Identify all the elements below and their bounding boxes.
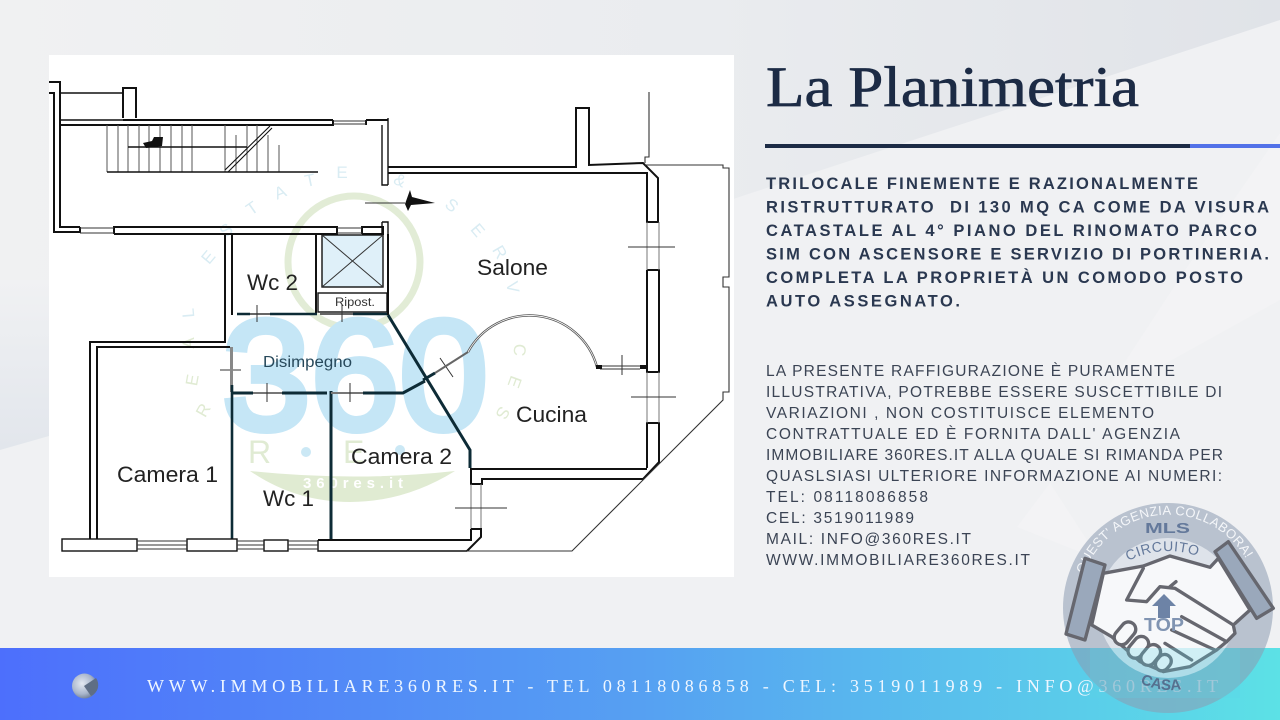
room labels: Disimpegno (263, 354, 352, 371)
watermark: 360 real estate services logo: R (248, 434, 271, 470)
watermark: 360 real estate services logo: E (336, 163, 348, 182)
panel: floor plan (49, 55, 734, 577)
badge label casa: CASA (1142, 675, 1181, 690)
text block: disclaimer and contacts: CONTRATTUALE ED È FORNITA DALL' AGENZIA (766, 426, 1181, 443)
watermark: 360 real estate services logo: 360res.it (303, 475, 403, 492)
badge label top: TOP (1144, 615, 1184, 635)
room labels: Camera 1 (117, 462, 218, 487)
staircase and landing walls (49, 82, 388, 234)
watermark: 360 real estate services logo: V (502, 280, 523, 295)
room labels: Camera 2 (351, 444, 452, 469)
footer bar (0, 648, 1280, 720)
text block: disclaimer and contacts: WWW.IMMOBILIARE360RES.IT (766, 552, 1031, 569)
handshake (1066, 542, 1273, 674)
room labels: Wc 2 (247, 270, 298, 295)
icon: footer logo (72, 674, 98, 698)
watermark: 360 real estate services logo: 360 (222, 289, 488, 463)
badge label MLS: MLS (1145, 520, 1190, 537)
text block: disclaimer and contacts: LA PRESENTE RAFFIGURAZIONE È PURAMENTE (766, 363, 1175, 380)
text block: property description: RISTRUTTURATO DI 130 MQ CA COME DA VISURA (766, 198, 1269, 216)
text block: disclaimer and contacts: IMMOBILIARE 360RES.IT ALLA QUALE SI RIMANDA PER (766, 447, 1223, 464)
watermark: 360 real estate services logo (179, 163, 530, 502)
text block: property description: TRILOCALE FINEMENTE E RAZIONALMENTE (766, 175, 1198, 193)
text block: property description: SIM CON ASCENSORE E SERVIZIO DI PORTINERIA. (766, 246, 1269, 264)
watermark: 360 real estate services logo: L (179, 307, 198, 319)
badge: MLS circuito casa top handshake (1063, 503, 1276, 713)
watermark: 360 real estate services logo: E (182, 373, 203, 387)
watermark: 360 real estate services logo: S (216, 219, 237, 241)
title rule (765, 144, 1280, 148)
room labels (117, 255, 588, 511)
watermark: 360 real estate services logo: E (197, 247, 219, 268)
room labels: Salone (477, 255, 548, 280)
room labels: Cucina (516, 402, 588, 427)
footer contacts: WWW.IMMOBILIARE360RES.IT - TEL 08118086858 - CEL: 3519011989 - INFO@360RES.IT (147, 676, 1218, 696)
band tint over lower hand (1090, 648, 1240, 698)
text block: disclaimer and contacts: CEL: 3519011989 (766, 510, 914, 527)
text block: disclaimer and contacts: QUASLSIASI ULTERIORE INFORMAZIONE AI NUMERI: (766, 468, 1222, 485)
watermark: 360 real estate services logo: C (510, 343, 530, 357)
walls: bottom facade with windows (62, 539, 467, 551)
watermark: 360 real estate services logo: R (192, 400, 215, 420)
watermark: 360 real estate services logo: E (467, 220, 489, 241)
text block: property description: COMPLETA LA PROPRIETÀ UN COMODO POSTO (766, 268, 1243, 287)
watermark: 360 real estate services logo: S (492, 403, 514, 422)
text block: disclaimer and contacts (766, 363, 1223, 569)
text block: property description: CATASTALE AL 4° PIANO DEL RINOMATO PARCO (766, 222, 1257, 240)
walls: salone and cucina (318, 92, 729, 551)
watermark: 360 real estate services logo: T (243, 198, 262, 219)
text block: disclaimer and contacts: MAIL: INFO@360RES.IT (766, 531, 972, 548)
text block: disclaimer and contacts: TEL: 08118086858 (766, 489, 928, 506)
text block: disclaimer and contacts: ILLUSTRATIVA, POTREBBE ESSERE SUSCETTIBILE DI (766, 384, 1222, 401)
badge label circuito: CIRCUITO (1126, 541, 1198, 560)
badge ring text: QUEST' AGENZIA COLLABORA! (1077, 506, 1253, 572)
room labels: Ripost. (335, 297, 375, 309)
room labels: Wc 1 (263, 486, 314, 511)
title: La Planimetria (766, 56, 1139, 119)
watermark: 360 real estate services logo: A (179, 337, 198, 349)
watermark: 360 real estate services logo: T (303, 170, 317, 191)
watermark: 360 real estate services logo: S (441, 194, 462, 216)
text block: property description: AUTO ASSEGNATO. (766, 292, 960, 310)
watermark: 360 real estate services logo: E (343, 434, 364, 470)
watermark: 360 real estate services logo: & (391, 169, 410, 192)
badge up arrow (1152, 594, 1176, 618)
text block: property description (766, 175, 1269, 310)
watermark: 360 real estate services logo: A (271, 181, 290, 203)
watermark: 360 real estate services logo: R (488, 242, 511, 262)
walls: bathrooms and lift (90, 234, 470, 539)
text block: disclaimer and contacts: VARIAZIONI , NON COSTITUISCE ELEMENTO (766, 405, 1154, 422)
watermark: 360 real estate services logo: E (504, 373, 525, 390)
